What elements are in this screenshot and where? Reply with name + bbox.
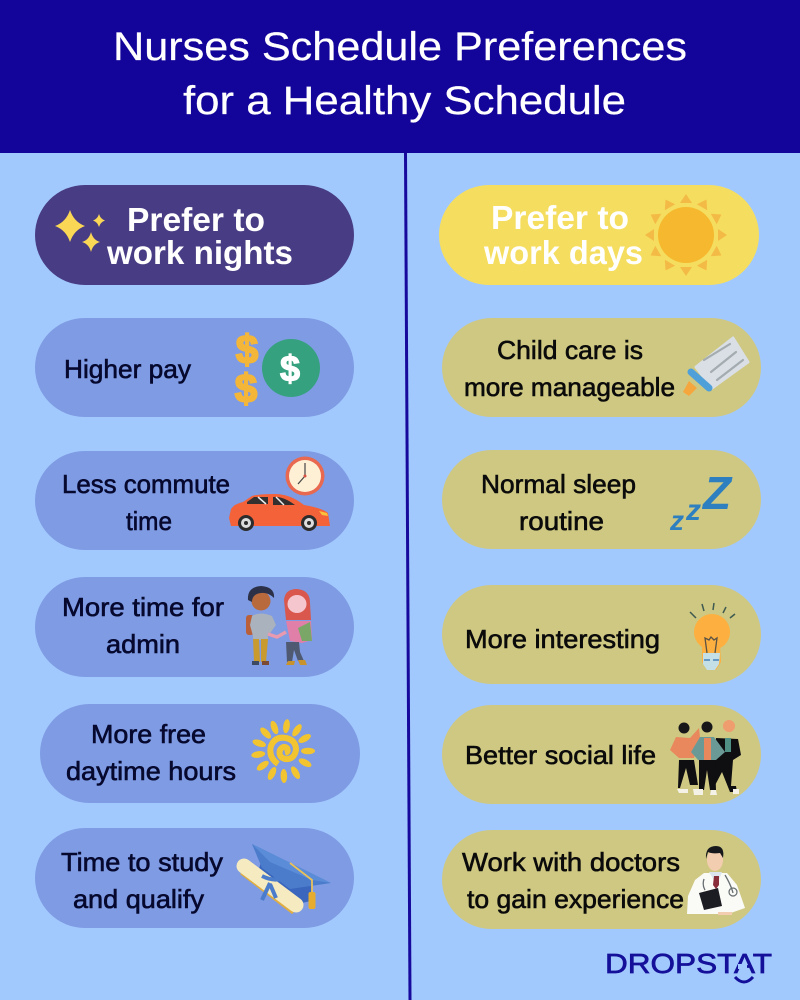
icon: baby bottle [683,338,748,396]
icon: sun [645,194,727,276]
item: higher pay: Higher pay [64,354,191,384]
item: work with doctors: Work with doctors [462,847,680,877]
item: better social life: Better social life [465,740,656,770]
item: work with doctors [442,830,761,929]
icon: sleeping z letters: z [669,505,684,536]
icon: dollar signs: $ [280,348,300,389]
icon: dollar signs: $ [235,367,257,411]
item: less commute time: Less commute [62,469,230,499]
panel: prefer to work nights [35,185,360,928]
icon: doctor [687,846,745,915]
item: normal sleep routine [442,450,761,549]
logo: dropstat: DROPSTAT [605,948,772,979]
icon: three friends [670,720,741,795]
item: more time for admin: More time for [62,592,224,622]
heading: prefer to work nights [35,185,354,285]
item: child care: more manageable [464,372,675,402]
title banner: for a Healthy Schedule [183,79,626,123]
item: better social life [442,705,761,804]
heading: prefer to work days: Prefer to [491,199,629,236]
icon: car and clock [229,456,330,531]
item: less commute time [35,451,354,550]
item: higher pay [35,318,354,417]
item: more interesting: More interesting [465,624,660,654]
item: work with doctors: to gain experience [467,884,684,914]
icon: sleeping z letters: z [685,494,701,527]
item: less commute time: time [126,506,172,536]
icon: graduation cap and scroll [240,844,331,914]
heading: prefer to work nights: Prefer to [127,201,265,238]
item: more free daytime hours [40,704,360,803]
icon: dollar signs: $ [236,328,258,372]
item: child care: Child care is [497,335,643,365]
heading: prefer to work days: work days [483,234,643,271]
icon: sleeping z letters: Z [701,467,733,519]
item: more free daytime hours: More free [91,719,206,749]
item: more free daytime hours: daytime hours [66,756,236,786]
heading: prefer to work nights: work nights [106,234,293,271]
item: more time for admin: admin [106,629,180,659]
item: time to study and qualify [35,828,354,928]
heading: prefer to work days [439,185,759,285]
item: time to study and qualify: Time to study [61,847,223,877]
icon: two children [246,586,312,665]
item: normal sleep routine: routine [519,506,604,536]
icon: sleeping z letters [669,467,733,536]
item: child care [442,318,761,417]
item: normal sleep routine: Normal sleep [481,469,636,499]
title banner: Nurses Schedule Preferences [113,25,687,69]
icon: dollar signs [235,328,320,411]
icon: spiral sun [251,719,315,783]
item: time to study and qualify: and qualify [73,884,204,914]
icon: light bulb [690,603,735,670]
title banner [0,0,800,153]
panel: prefer to work days [439,185,761,929]
item: more interesting [442,585,761,684]
item: more time for admin [35,577,354,677]
